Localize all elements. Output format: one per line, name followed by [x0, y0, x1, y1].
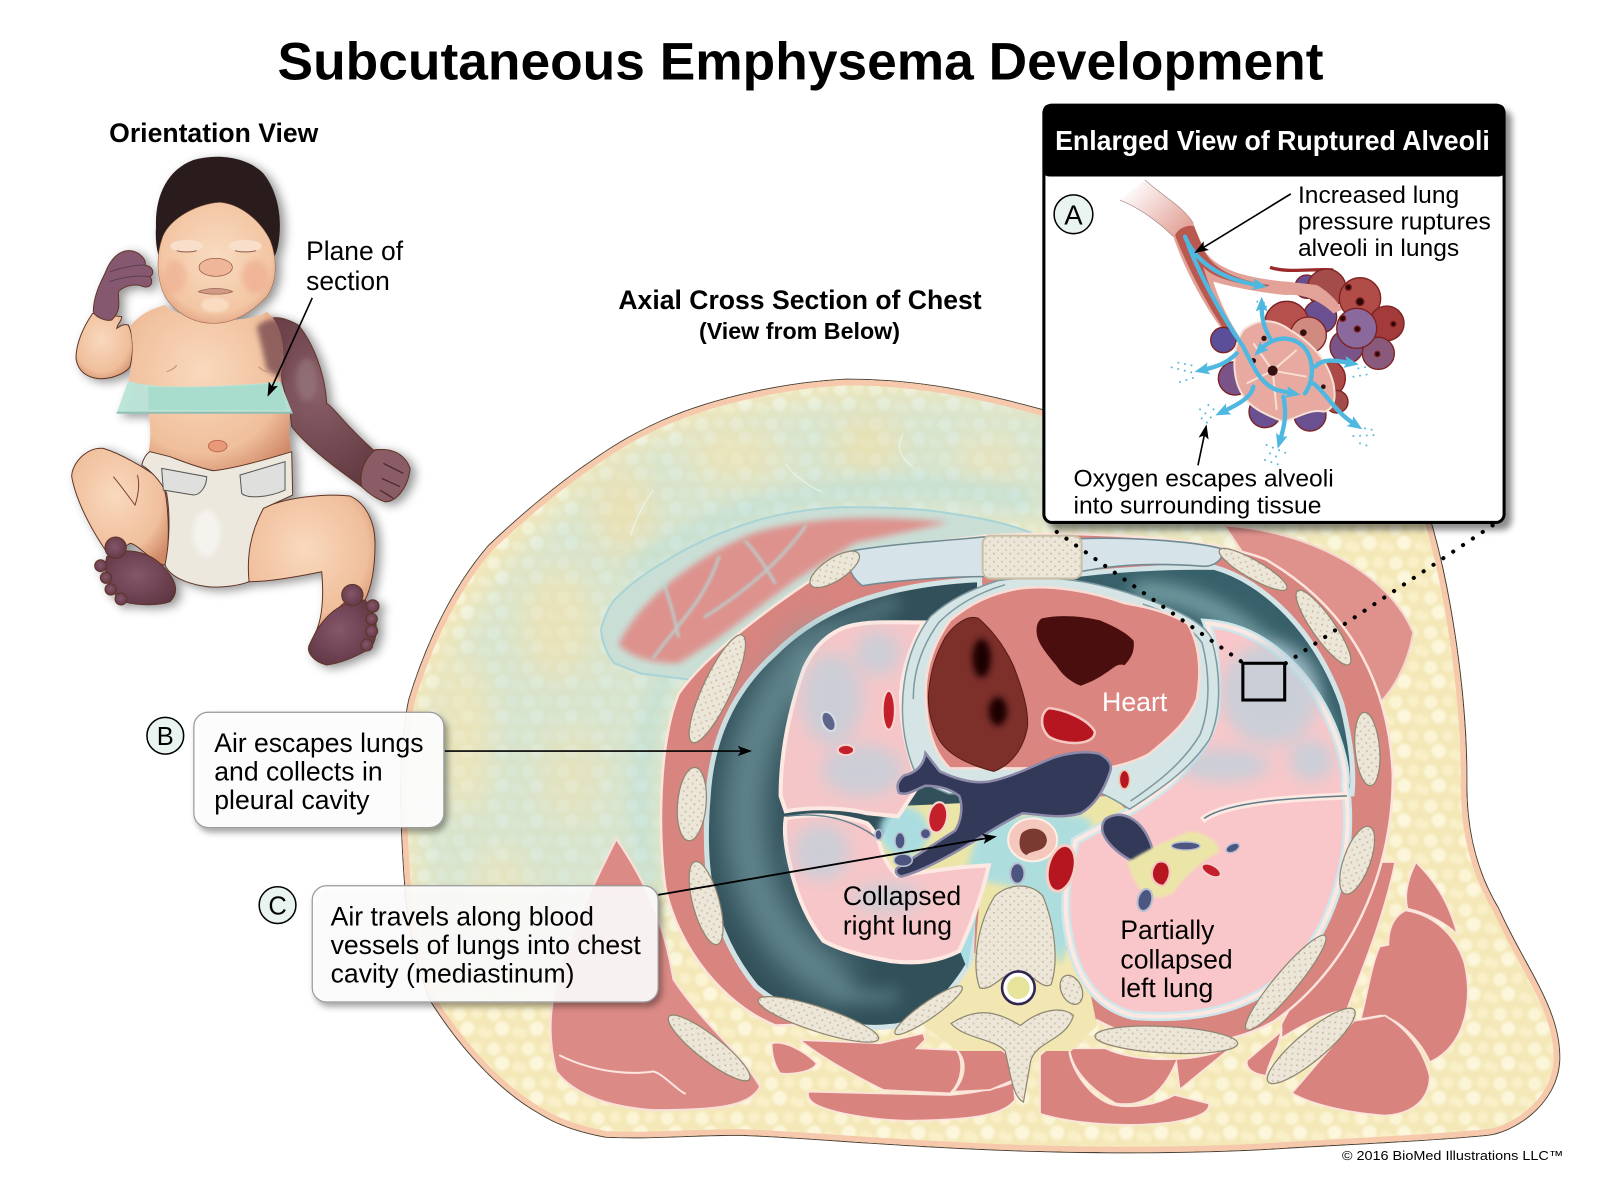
escaping oxygen dots [1172, 302, 1377, 465]
alveoli illustration [1120, 180, 1404, 465]
aortic outflow [1042, 708, 1095, 743]
text: increased lung pressure: pressure ruptures [1298, 209, 1491, 236]
marker B [147, 717, 184, 754]
right lung collapsed [781, 622, 989, 962]
face [158, 202, 275, 323]
lung labels [843, 881, 1233, 1003]
vessels in right lung [883, 691, 895, 730]
pleural cavity right side of patient [706, 580, 980, 1027]
fine air tracks [631, 434, 913, 536]
baby left leg [72, 448, 176, 605]
descending aorta [1043, 842, 1080, 894]
box C [312, 886, 658, 1002]
panel header [1043, 104, 1505, 177]
mouth [198, 288, 233, 294]
plane of section band [117, 381, 293, 413]
text B: pleural cavity [214, 785, 370, 815]
airway edge lines [1120, 180, 1193, 237]
text B: Air escapes lungs [214, 728, 423, 758]
heading: axial cross section: (View from Below) [699, 318, 900, 344]
airway [1120, 180, 1342, 383]
marker A: A [1064, 199, 1083, 230]
mediastinum tissue [867, 796, 1224, 969]
eyelid lines [177, 251, 256, 252]
nipples and navel [167, 365, 268, 452]
chest wall muscle ring [661, 534, 1393, 1043]
airway lumen [1175, 226, 1270, 345]
lower left muscle lines [559, 1055, 686, 1094]
label: plane of section: Plane of [306, 236, 404, 266]
lower alveolar cluster [1211, 301, 1348, 431]
right back muscles [1040, 862, 1468, 1125]
text: oxygen escapes: into surrounding tissue [1073, 492, 1321, 519]
spinal cord [1002, 971, 1035, 1004]
pulmonary vein [896, 752, 1111, 877]
label: plane of section: section [306, 266, 390, 296]
body outline [388, 367, 1571, 1163]
baby right leg [247, 495, 379, 665]
text: increased lung pressure [1298, 182, 1491, 262]
sternum and costal cartilage [849, 536, 1223, 586]
baby left hand [93, 251, 153, 320]
fissure shadow line [1204, 796, 1347, 818]
purple chest discolouration [257, 319, 290, 380]
heading: orientation view: Orientation View [109, 118, 319, 148]
left latissimus muscle [551, 839, 760, 1110]
azygos vein [1010, 863, 1024, 884]
left lung partially collapsed [1066, 623, 1348, 1017]
pleural cavity left side of patient [1061, 567, 1353, 796]
lower back muscles left [772, 1033, 1015, 1121]
marker C [259, 887, 296, 923]
text C [331, 902, 641, 989]
dotted lines to inset [1052, 520, 1500, 663]
illustration: axial chest cross section [388, 367, 1571, 1163]
fat lobule texture over emphysema [419, 398, 1469, 892]
esophagus [1008, 818, 1057, 861]
callout C [259, 886, 658, 1002]
left foot [95, 537, 176, 605]
ribs [661, 542, 1383, 1093]
diaper [142, 452, 293, 587]
copyright: © 2016 BioMed Illustrations LLC™ [1342, 1148, 1563, 1163]
title: Subcutaneous Emphysema Development [278, 33, 1324, 92]
arrow: increased lung pressure [1196, 194, 1291, 252]
baby left arm [76, 313, 133, 379]
heading: axial cross section: Axial Cross Section of Chest [618, 285, 982, 315]
arrow: oxygen escapes [1198, 427, 1206, 465]
pectoral muscle right [1224, 526, 1413, 709]
text C: Air travels along blood [331, 902, 594, 932]
text C: vessels of lungs into chest [331, 930, 641, 960]
fissure line right lung [786, 815, 876, 837]
right foot [309, 584, 379, 665]
cheeks [242, 260, 268, 293]
box B [194, 712, 444, 828]
lower lobe [785, 815, 989, 962]
arrow C [658, 837, 995, 895]
heart label: Heart [1102, 687, 1168, 717]
lung blue patches lower [793, 823, 923, 912]
baby torso [128, 305, 292, 471]
coronary vessel [1119, 770, 1130, 789]
fissure [1202, 796, 1347, 820]
marker B: B [157, 723, 174, 751]
arm highlight [296, 358, 317, 402]
alveolar openings [1251, 329, 1326, 389]
lung blue patches [1179, 643, 1334, 782]
left hilum vessels [1128, 832, 1241, 913]
pericardium and heart [902, 578, 1219, 809]
central alveolar sac [1234, 321, 1335, 422]
upper lobe [781, 622, 923, 816]
callout B [147, 712, 444, 828]
lung labels: Partially [1120, 915, 1215, 945]
text: oxygen escapes: Oxygen escapes alveoli [1073, 466, 1334, 493]
alveolar septa [1247, 343, 1307, 410]
chin [201, 298, 229, 312]
upper alveolar cluster [1295, 269, 1404, 369]
lung inner rim [1066, 623, 1348, 1017]
arrow: plane of section [268, 298, 312, 395]
text: increased lung pressure: Increased lung [1298, 182, 1459, 209]
inset panel: enlarged view of ruptured alveoli [1043, 104, 1505, 522]
lung labels: collapsed [1120, 944, 1233, 974]
label: plane of section [306, 236, 404, 296]
emphysema in subcutaneous fat [388, 367, 1571, 1152]
baby right arm and fist [257, 318, 410, 502]
illustration: infant with plane of section [72, 157, 410, 665]
eyes [170, 240, 262, 252]
nose [199, 258, 232, 276]
marker C: C [268, 892, 287, 920]
heading: axial cross section [618, 285, 982, 344]
left ventricle cavity [1037, 616, 1134, 686]
pericardium layers [913, 585, 1208, 801]
enlargement square [1243, 663, 1285, 700]
body skin rim [401, 380, 1559, 1152]
lung labels: left lung [1120, 973, 1213, 1003]
text: increased lung pressure: alveoli in lungs [1298, 235, 1459, 262]
text B: and collects in [214, 757, 383, 787]
oxygen flow arrows [1185, 237, 1353, 438]
pectoral muscle left [601, 507, 1034, 680]
lung labels: Collapsed [843, 881, 961, 911]
lung labels: right lung [843, 911, 952, 941]
panel frame [1044, 105, 1504, 522]
hilum vessels [875, 801, 949, 866]
yellow tissue around spine [923, 949, 1097, 1051]
left pulmonary vein [1102, 815, 1154, 868]
heart muscle [926, 587, 1199, 768]
baby head [156, 157, 280, 323]
panel header: Enlarged View of Ruptured Alveoli [1055, 125, 1490, 156]
right ventricle cavity [928, 617, 1028, 771]
text B [214, 728, 423, 815]
vertebra and spine [951, 886, 1073, 1102]
arrow B [445, 750, 750, 752]
red arteriole [1270, 267, 1333, 270]
text: oxygen escapes [1073, 466, 1334, 519]
hair [156, 157, 280, 257]
ventricle dark spots [972, 639, 1007, 726]
text C: cavity (mediastinum) [331, 959, 574, 989]
lung blue patches upper [801, 631, 903, 796]
marker A [1054, 195, 1093, 234]
